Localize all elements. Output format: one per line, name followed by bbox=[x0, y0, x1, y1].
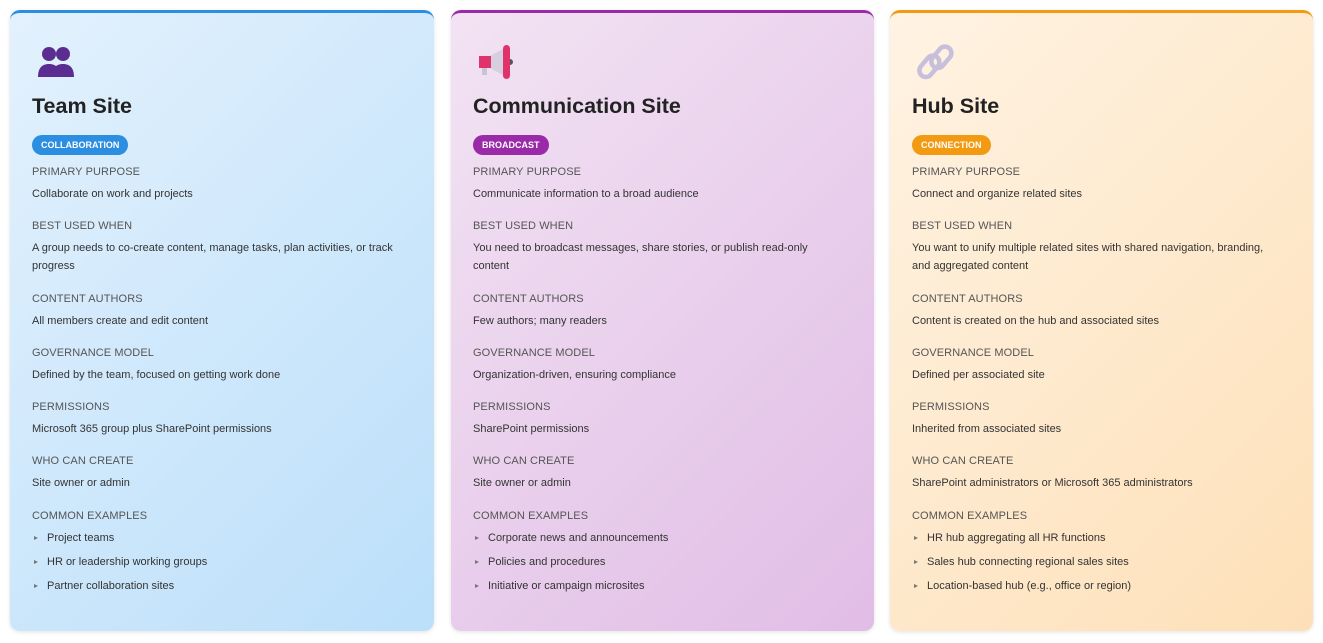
panel: communication site bbox=[451, 10, 874, 631]
badge bbox=[473, 135, 548, 155]
badge bbox=[912, 135, 990, 155]
text block: details bbox=[473, 166, 808, 592]
badge: COLLABORATION bbox=[41, 140, 119, 150]
text block: details: Initiative or campaign microsites bbox=[488, 580, 645, 592]
text block: details: Policies and procedures bbox=[488, 556, 605, 568]
text block: details: Communicate information to a broad audience bbox=[473, 188, 699, 200]
badge bbox=[32, 135, 128, 155]
text block: details: HR hub aggregating all HR functions bbox=[927, 532, 1106, 544]
icon: link bbox=[917, 44, 954, 80]
text block: details: HR or leadership working groups bbox=[47, 556, 207, 568]
heading: Team Site bbox=[32, 94, 132, 118]
text block: details: Project teams bbox=[47, 532, 114, 544]
text block: details: GOVERNANCE MODEL bbox=[912, 347, 1034, 359]
heading: Hub Site bbox=[912, 94, 999, 118]
text block: details bbox=[32, 166, 393, 592]
text block: details: GOVERNANCE MODEL bbox=[32, 347, 154, 359]
text block: details: PRIMARY PURPOSE bbox=[473, 166, 581, 178]
text block: details: CONTENT AUTHORS bbox=[32, 293, 143, 305]
text block: details: CONTENT AUTHORS bbox=[912, 293, 1023, 305]
text block: details: SharePoint permissions bbox=[473, 423, 589, 435]
text block: details: Corporate news and announcements bbox=[488, 532, 668, 544]
text block: details: BEST USED WHEN bbox=[473, 220, 573, 232]
text block: details bbox=[912, 166, 1263, 592]
text block: details: WHO CAN CREATE bbox=[912, 455, 1013, 467]
text block: details: COMMON EXAMPLES bbox=[473, 510, 588, 522]
text block: details: and aggregated content bbox=[912, 260, 1028, 272]
text block: details: Microsoft 365 group plus SharePoint permissions bbox=[32, 423, 272, 435]
text block: details: Inherited from associated sites bbox=[912, 423, 1061, 435]
text block: details: WHO CAN CREATE bbox=[32, 455, 133, 467]
badge: CONNECTION bbox=[921, 140, 982, 150]
text block: details: Site owner or admin bbox=[32, 477, 130, 489]
text block: details: Site owner or admin bbox=[473, 477, 571, 489]
text block: details: You want to unify multiple related sites with shared navigation, branding, bbox=[912, 242, 1263, 254]
text block: details: Connect and organize related sites bbox=[912, 188, 1082, 200]
heading: Communication Site bbox=[473, 94, 681, 118]
text block: details: Location-based hub (e.g., office or region) bbox=[927, 580, 1131, 592]
text block: details: Organization-driven, ensuring compliance bbox=[473, 369, 676, 381]
text block: details: CONTENT AUTHORS bbox=[473, 293, 584, 305]
text block: details: Defined by the team, focused on getting work done bbox=[32, 369, 280, 381]
text block: details: You need to broadcast messages, share stories, or publish read-only bbox=[473, 242, 808, 254]
text block: details: SharePoint administrators or Microsoft 365 administrators bbox=[912, 477, 1193, 489]
text block: details: Collaborate on work and projects bbox=[32, 188, 193, 200]
text block: details: COMMON EXAMPLES bbox=[32, 510, 147, 522]
text block: details: PERMISSIONS bbox=[912, 401, 990, 413]
text block: details: A group needs to co-create content, manage tasks, plan activities, or track progress bbox=[32, 242, 393, 272]
text block: details: Partner collaboration sites bbox=[47, 580, 174, 592]
text block: details: content bbox=[473, 260, 509, 272]
text block: details: PRIMARY PURPOSE bbox=[32, 166, 140, 178]
badge: BROADCAST bbox=[482, 140, 540, 150]
panel: team site bbox=[10, 10, 434, 631]
text block: details: PRIMARY PURPOSE bbox=[912, 166, 1020, 178]
text block: details: PERMISSIONS bbox=[32, 401, 110, 413]
text block: details: PERMISSIONS bbox=[473, 401, 551, 413]
text block: details: Few authors; many readers bbox=[473, 315, 607, 327]
text block: details: WHO CAN CREATE bbox=[473, 455, 574, 467]
text block: details: All members create and edit content bbox=[32, 315, 208, 327]
panel: hub site bbox=[890, 10, 1313, 631]
icon: people bbox=[38, 47, 74, 77]
text block: details: GOVERNANCE MODEL bbox=[473, 347, 595, 359]
text block: details: Content is created on the hub and associated sites bbox=[912, 315, 1159, 327]
text block: details: BEST USED WHEN bbox=[912, 220, 1012, 232]
text block: details: COMMON EXAMPLES bbox=[912, 510, 1027, 522]
text block: details: Defined per associated site bbox=[912, 369, 1045, 381]
icon: megaphone bbox=[479, 45, 513, 79]
text block: details: Sales hub connecting regional sales sites bbox=[927, 556, 1129, 568]
text block: details: BEST USED WHEN bbox=[32, 220, 132, 232]
